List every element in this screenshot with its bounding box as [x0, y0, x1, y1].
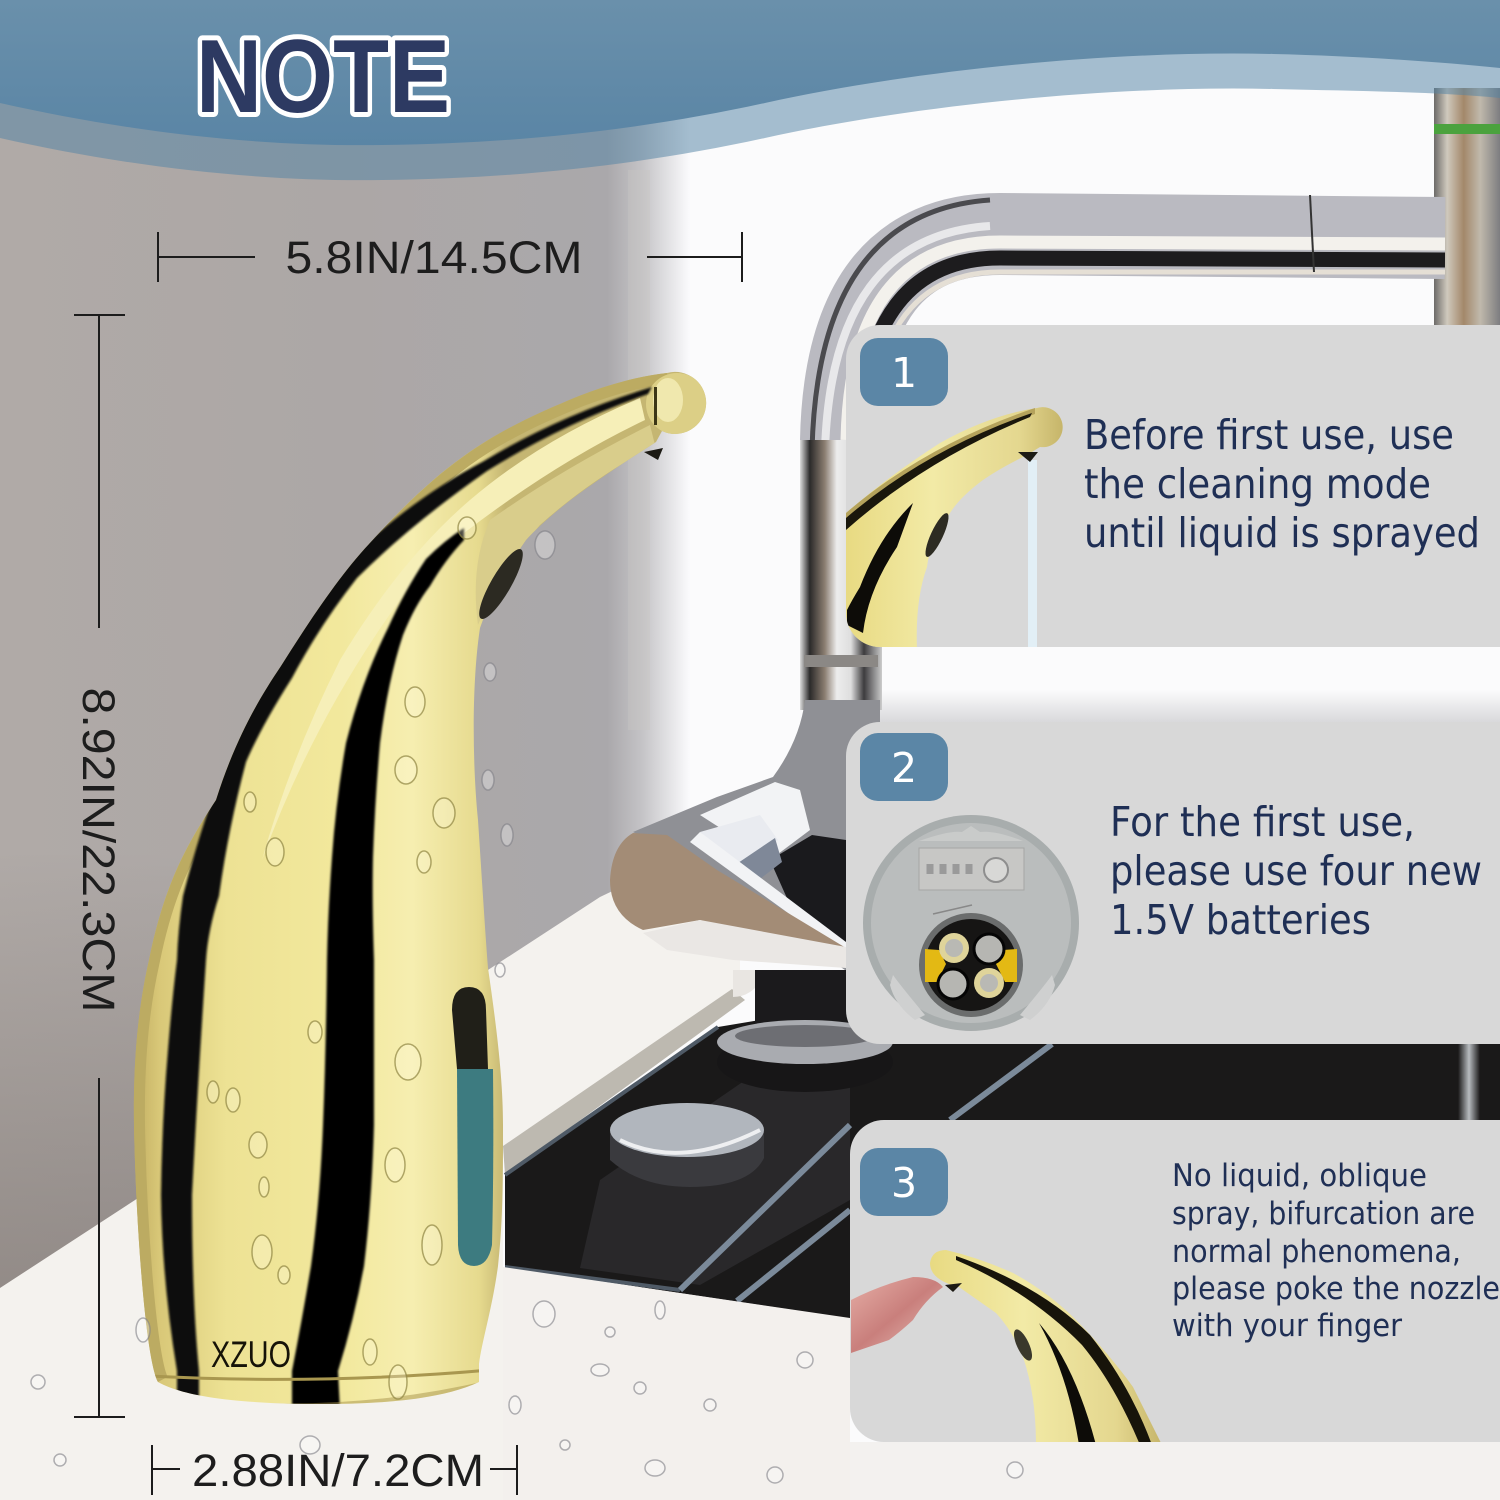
text 3 [1172, 1158, 1500, 1344]
title: NOTE [196, 19, 450, 135]
handle tan [610, 833, 846, 960]
text 1 [1084, 411, 1480, 557]
text 3: with your finger [1172, 1308, 1402, 1344]
panel 2 [846, 722, 1500, 1044]
drain cap [610, 1130, 764, 1187]
handle chrome [633, 700, 880, 970]
header wave: dark band [0, 0, 1500, 145]
dark gold edge along the outside [134, 373, 667, 1382]
dimension: base: 2.88IN/7.2CM [192, 1445, 484, 1496]
dimension: width: 5.8IN/14.5CM [286, 232, 582, 283]
mini dispenser 1 [846, 407, 1063, 650]
badge 3 [860, 1148, 948, 1216]
battery compartment illustration [863, 815, 1079, 1031]
finger [851, 1277, 943, 1353]
text 2: For the first use, [1110, 798, 1415, 846]
badge 2 [860, 733, 948, 801]
brand: XZUO [211, 1334, 291, 1375]
water drops around [31, 531, 1023, 1483]
badge 3: 3 [891, 1159, 917, 1207]
nozzle [644, 448, 663, 460]
dimension: height [73, 315, 125, 1417]
text 3: spray, bifurcation are [1172, 1196, 1475, 1232]
text 1: Before first use, use [1084, 411, 1454, 459]
level window [452, 987, 488, 1069]
black reflection: main stripe [292, 528, 464, 1410]
stem and base ring [733, 970, 767, 997]
black reflection: outer stripe [161, 387, 652, 1410]
water drops on body [207, 517, 476, 1399]
header wave: light band [0, 0, 1500, 180]
badge 1: 1 [891, 349, 917, 397]
sensor [472, 544, 530, 624]
dimension: height: 8.92IN/22.3CM [73, 688, 124, 1012]
dimension: width [158, 232, 742, 283]
text 2 [1110, 798, 1482, 944]
text 3: No liquid, oblique [1172, 1158, 1427, 1194]
badge 1 [860, 338, 948, 406]
text 3: normal phenomena, [1172, 1234, 1461, 1270]
lower counter [503, 1267, 850, 1500]
counter top [0, 830, 740, 1500]
panel 1 [846, 325, 1500, 650]
text 1: the cleaning mode [1084, 460, 1431, 508]
panel 3 [850, 1120, 1500, 1445]
shaded underside of spout [476, 425, 655, 625]
soap dispenser [31, 372, 1023, 1483]
text 2: 1.5V batteries [1110, 896, 1371, 944]
mini dispenser 3 [930, 1250, 1162, 1445]
dark sink tray [505, 1000, 1500, 1320]
badge 2: 2 [891, 744, 917, 792]
base seam [150, 1370, 490, 1379]
pale highlight below the stripe [262, 398, 645, 860]
faucet [610, 88, 1500, 1187]
